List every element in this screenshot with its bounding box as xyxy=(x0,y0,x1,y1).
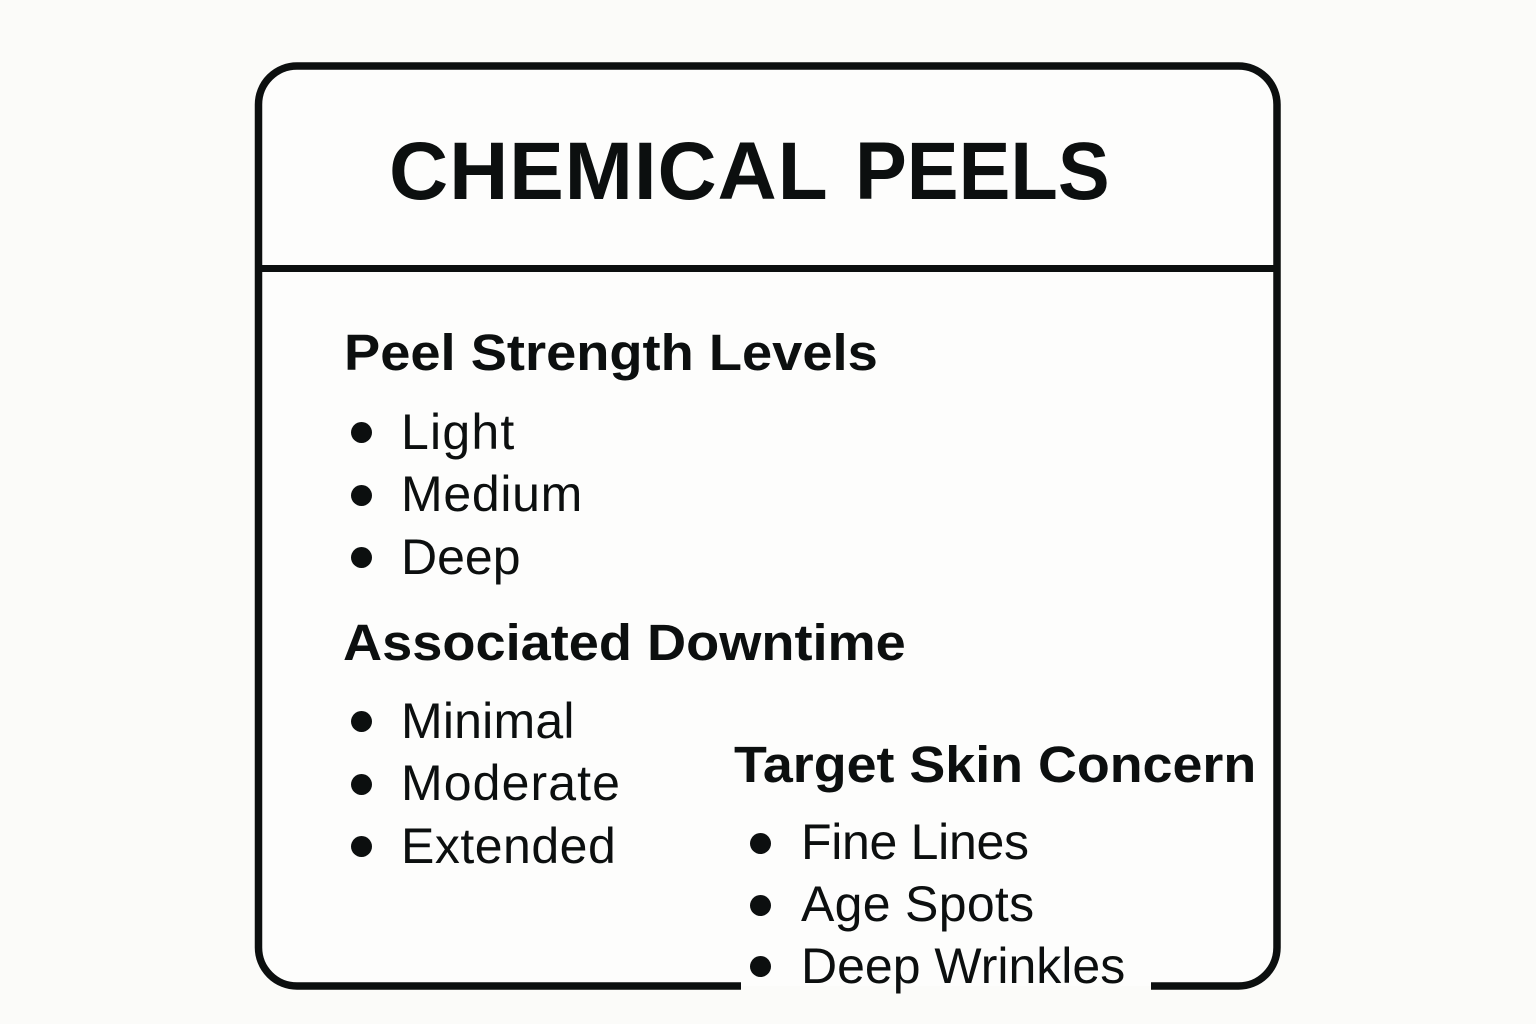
heading: peel strength levels: Peel Strength Levels xyxy=(344,324,878,381)
item: minimal: Minimal xyxy=(401,693,575,749)
bullet: minimal xyxy=(350,711,372,732)
bullet: deep wrinkles xyxy=(750,956,771,977)
bullet: medium xyxy=(350,485,372,506)
panel: associated downtime xyxy=(343,614,906,874)
item: medium: Medium xyxy=(401,466,583,522)
title: PEELS xyxy=(854,126,1109,217)
item: fine lines: Fine Lines xyxy=(801,814,1029,870)
bullet: deep xyxy=(350,547,372,568)
title xyxy=(389,126,1109,217)
item: moderate: Moderate xyxy=(401,755,621,811)
item: extended: Extended xyxy=(401,818,616,874)
bullet: moderate xyxy=(350,774,372,795)
heading: associated downtime: Associated Downtime xyxy=(343,614,906,671)
bullet: fine lines xyxy=(750,833,771,854)
heading: target skin concern: Target Skin Concern xyxy=(734,736,1256,793)
title: CHEMICAL xyxy=(389,126,829,217)
panel: peel strength levels xyxy=(344,324,878,585)
item: deep wrinkles: Deep Wrinkles xyxy=(801,938,1125,994)
bullet: light xyxy=(350,422,372,443)
item: deep: Deep xyxy=(401,529,521,585)
panel: target skin concern xyxy=(734,736,1256,994)
bullet: extended xyxy=(350,836,372,857)
item: light: Light xyxy=(401,404,515,460)
item: age spots: Age Spots xyxy=(801,876,1034,932)
bullet: age spots xyxy=(750,895,771,916)
